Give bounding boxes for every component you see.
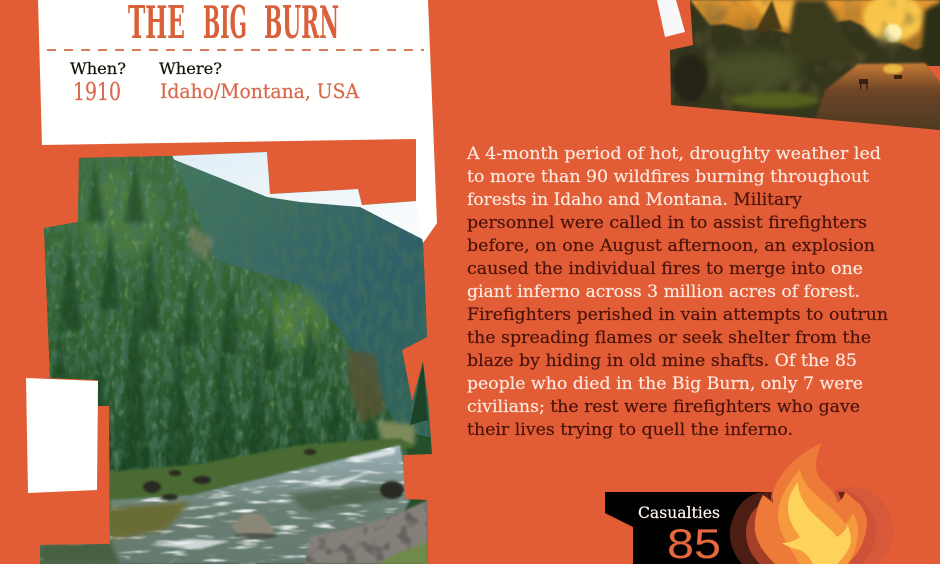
body text	[466, 144, 888, 440]
green bushes	[710, 52, 800, 88]
small dark wedges	[766, 492, 772, 503]
casualties banner	[605, 492, 765, 564]
forested hillside	[44, 156, 408, 472]
body text: before, on one August afternoon, an explosion	[467, 236, 875, 256]
boulder	[231, 513, 276, 538]
silhouetted trees	[785, 0, 860, 62]
left dark shadow	[730, 492, 790, 564]
when label: When?	[70, 59, 126, 78]
body text: blaze by hiding in old mine shafts. Of the 85	[467, 351, 857, 371]
body text: the spreading flames or seek shelter from the	[467, 328, 871, 348]
photo: fire at the river	[665, 0, 940, 135]
casualties label: Casualties	[638, 504, 720, 522]
river	[40, 445, 410, 564]
river texture	[40, 445, 410, 564]
fire glow	[863, 0, 923, 42]
river bank	[108, 438, 415, 502]
hillside conifers	[46, 160, 379, 470]
light orange inner flame	[778, 470, 858, 564]
body text: their lives trying to quell the inferno.	[467, 420, 793, 440]
sky	[170, 152, 437, 240]
blazing treetops	[690, 0, 940, 50]
mountain slope	[160, 150, 440, 440]
year: 1910	[73, 78, 121, 106]
grass lower right	[378, 542, 428, 564]
far-right tree	[410, 362, 428, 425]
right shadow flames	[820, 487, 893, 564]
yellow core	[782, 482, 851, 564]
body text: civilians; the rest were firefighters who gave	[467, 397, 860, 417]
deer	[859, 75, 902, 89]
bank stones	[143, 449, 404, 500]
where label: Where?	[159, 59, 222, 78]
rock texture	[305, 500, 428, 564]
body text: A 4-month period of hot, droughty weather led	[466, 144, 881, 164]
orange corner	[927, 66, 940, 82]
whitewater	[150, 448, 395, 549]
rock face	[347, 350, 385, 425]
rocks lower right	[305, 500, 428, 564]
main orange flame	[755, 443, 867, 564]
sunlit tree patch	[265, 292, 325, 348]
body text: people who died in the Big Burn, only 7 were	[467, 374, 863, 394]
glowing water	[815, 63, 940, 132]
white tab on fire photo	[657, 0, 685, 37]
panel: title card	[38, 0, 437, 243]
title	[128, 0, 339, 49]
white tab on photo	[26, 378, 98, 493]
body text: giant inferno across 3 million acres of forest.	[467, 282, 860, 302]
mossy shallows	[108, 502, 190, 540]
body text: to more than 90 wildfires burning throughout	[467, 167, 869, 187]
body text: Firefighters perished in vain attempts to outrun	[467, 305, 888, 325]
body text: personnel were called in to assist firefighters	[467, 213, 867, 233]
icon: flame	[730, 443, 893, 564]
location: Idaho/Montana, USA	[160, 79, 360, 103]
body text: caused the individual fires to merge into one	[467, 259, 863, 279]
photo grain	[671, 0, 935, 110]
mountain texture	[302, 216, 428, 436]
body text: forests in Idaho and Montana. Military	[467, 190, 802, 210]
hillside texture	[44, 156, 408, 474]
photo: forest and river	[40, 135, 440, 564]
